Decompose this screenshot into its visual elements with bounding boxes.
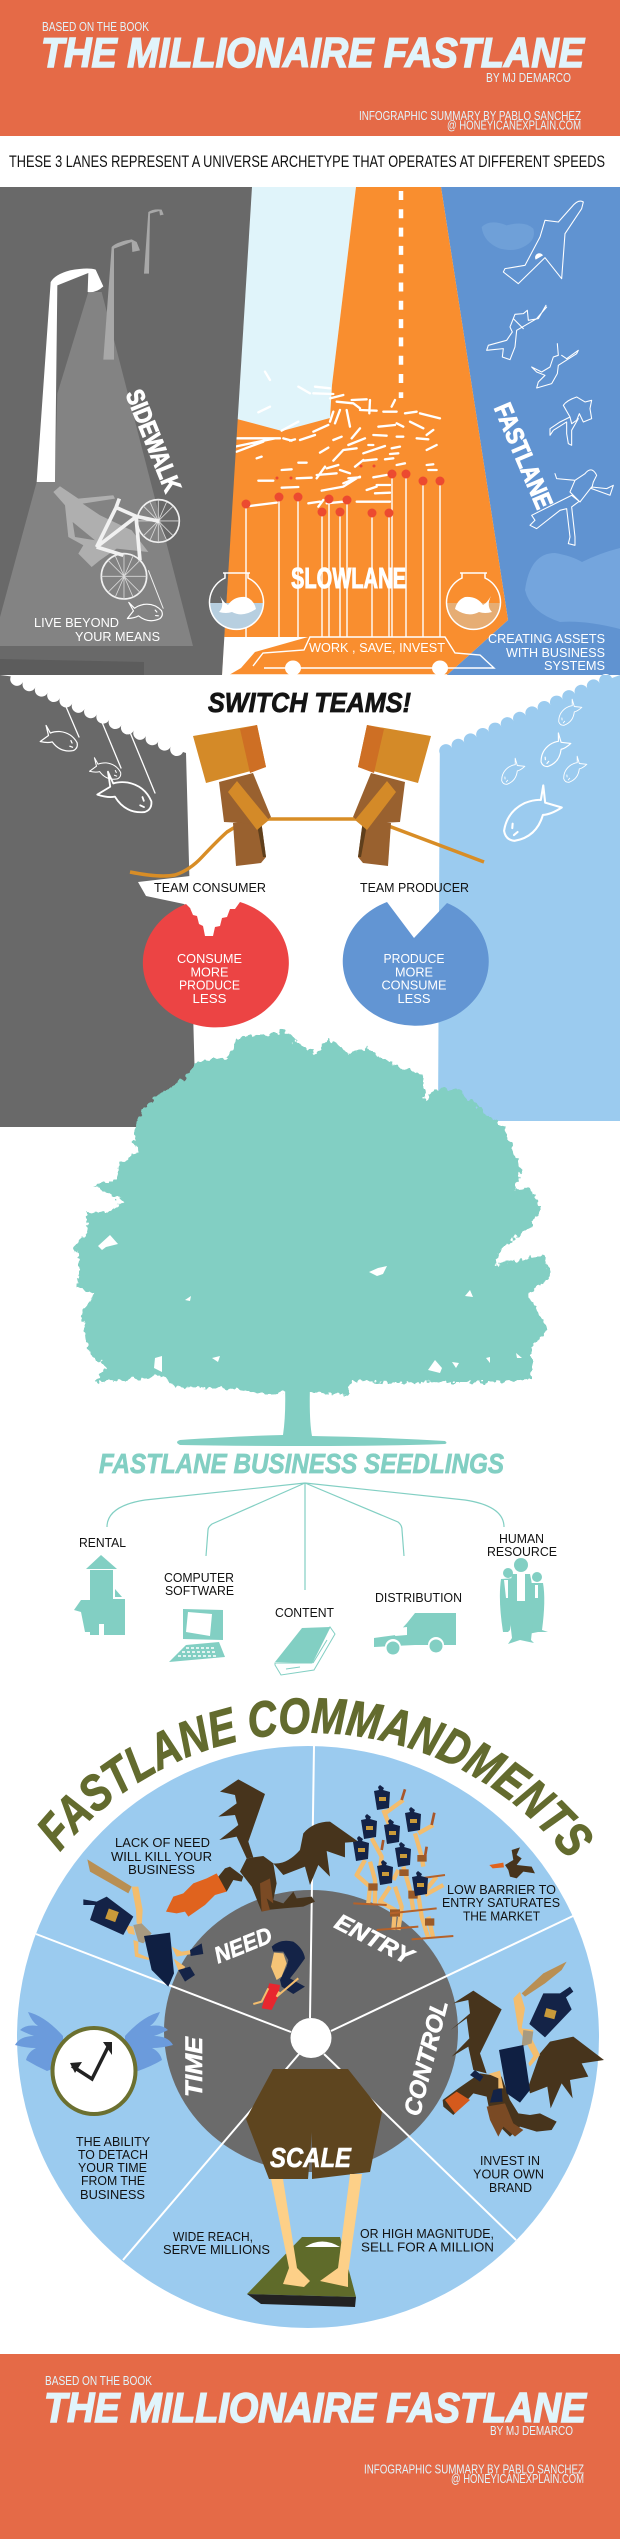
commandment caption: entry [442,1882,560,1924]
slowlane caption: WORK , SAVE, INVEST [309,640,445,655]
icon: book [275,1627,335,1675]
circle text: produce more: PRODUCE [384,951,445,966]
icon: skydiver 4 [530,470,613,545]
lamp posts with red lights [242,464,444,637]
circle text: produce more: CONSUME [382,978,447,992]
commandment caption: entry: ENTRY SATURATES [442,1895,560,1910]
lamp: near [37,268,103,482]
dragon fire [166,1873,227,1917]
commandment caption: need [111,1835,212,1877]
scalloped awning [0,674,620,1121]
circle text: produce more: LESS [398,991,431,1006]
tree holes [98,1235,522,1373]
fish on hooks [40,695,157,818]
circle text: consume more: LESS [192,991,227,1006]
road centre dashes [399,191,403,398]
team labels: TEAM PRODUCER [360,880,469,895]
figure: control dragon and knight [443,1962,604,2137]
circle: team producer [343,902,489,1026]
car outline with wheels [229,637,494,676]
fastlane figures [487,201,613,545]
fastlane label: FASTLANE [488,399,558,513]
team consumer white tab [138,876,200,915]
icon: skydiver 3 [550,397,592,445]
commandment caption: time: FROM THE [81,2173,145,2188]
commandment caption: need: BUSINESS [128,1862,195,1877]
figure: knight crowd [353,1785,453,1939]
header banner [0,0,620,136]
sidewalk caption [34,615,160,644]
icon: people [500,1558,548,1644]
circle text: produce more [382,951,447,1006]
white kerb [222,637,308,675]
seedling labels: RENTAL [79,1535,126,1550]
commandments wheel [17,1746,599,2328]
figure: need knight [83,1859,203,1987]
panel: team producer blue [438,675,620,1121]
icon: rental building [74,1555,125,1635]
commandment caption: time: THE ABILITY [76,2134,150,2149]
wheel label: time: TIME [181,2036,208,2097]
wheel label: need: NEED [210,1922,276,1968]
team labels [154,880,469,895]
commandment caption: control: YOUR OWN [473,2166,544,2182]
need quadrant figures [83,1779,358,2010]
seedling labels: COMPUTER [164,1570,234,1585]
circle text: consume more: CONSUME [177,951,242,966]
commandment caption: entry: THE MARKET [463,1908,540,1924]
icon: skydiver 2 [532,344,578,388]
circle text: consume more: MORE [190,964,229,980]
heading: fastlane commandments: FASTLANE COMMANDMENTS [37,1698,592,1856]
tree [75,1028,550,1446]
figure: need dragon [166,1779,358,1917]
team labels: TEAM CONSUMER [154,880,266,895]
city rubble [235,372,440,507]
seedling labels: SOFTWARE [165,1583,234,1598]
commandment caption: scale wide: WIDE REACH, [173,2229,253,2244]
fishbowl: right [446,573,500,630]
circle: team consumer [143,902,289,1027]
fish on hook [127,602,163,622]
figure: right box man [353,725,431,866]
commandment caption: scale high: SELL FOR A MILLION [361,2240,494,2254]
commandment caption: need: WILL KILL YOUR [111,1849,212,1864]
rope [130,819,484,876]
panel: sidewalk background [0,187,252,675]
cyclist silhouette [53,486,148,567]
header: author: BY MJ DEMARCO [486,70,571,85]
fastlane caption [488,631,605,673]
seedling labels: HUMAN [499,1531,544,1546]
fastlane caption: WITH BUSINESS [506,645,605,660]
figure: scale man [246,2069,382,2307]
commandment caption: scale high: OR HIGH MAGNITUDE, [360,2226,494,2241]
icon: truck [374,1613,456,1655]
bicycle [97,499,180,609]
commandment caption: scale wide [163,2229,270,2257]
icon: skydiver 1 [487,305,547,360]
figure: small dragon [489,1847,535,1878]
lamps, light cone and cyclist [0,209,193,646]
panel: slowlane road [222,187,508,676]
sidewalk caption: YOUR MEANS [75,629,160,644]
cloud: top [482,222,534,250]
seedling labels: RESOURCE [487,1544,557,1559]
fishbowl: left [209,573,264,630]
slowlane label: SLOWLANE [291,563,406,595]
circle text: consume more: PRODUCE [179,978,240,992]
tree trunk [177,1385,446,1446]
commandment caption: need: LACK OF NEED [115,1835,210,1850]
footer banner [0,2354,620,2539]
heading: fastlane business seedlings: FASTLANE BUSINESS SEEDLINGS [99,1448,504,1479]
commandment caption: control: BRAND [489,2180,532,2195]
icon: plane [503,201,583,284]
footer: author: BY MJ DEMARCO [490,2423,573,2438]
ground shadow [0,659,144,675]
heading: switch teams: SWITCH TEAMS! [208,687,411,718]
commandment caption: time: BUSINESS [80,2187,145,2202]
footer: based on the book: BASED ON THE BOOK [45,2373,152,2388]
seedling labels: DISTRIBUTION [375,1590,462,1605]
seedling labels: CONTENT [275,1605,334,1620]
commandment caption: time: YOUR TIME [78,2160,147,2175]
panel: team consumer gray [0,675,196,1127]
commandment caption: time [76,2134,150,2202]
commandment caption: scale wide: SERVE MILLIONS [163,2242,270,2257]
icon: winged clock [15,2012,173,2114]
lamp: far [144,209,164,274]
free fish [496,699,587,847]
wheel label: entry: ENTRY [331,1908,420,1971]
commandment caption: control [473,2153,544,2195]
fastlane caption: CREATING ASSETS [488,631,605,646]
cloud: bottom [525,548,620,629]
icon: computer [169,1609,225,1662]
commandment caption: entry: LOW BARRIER TO [447,1882,556,1897]
header: based on the book: BASED ON THE BOOK [42,19,149,34]
circle text: consume more [177,951,242,1006]
sidewalk label: SIDEWALK [120,386,186,496]
commandment caption: control: INVEST IN [480,2153,540,2168]
lamp: mid [103,239,140,360]
panel: fastlane background [441,187,620,675]
commandment caption: scale high [360,2226,494,2254]
connector lines [107,1483,504,1590]
commandment caption: time: TO DETACH [78,2147,148,2162]
fastlane caption: SYSTEMS [544,658,605,673]
circle text: produce more: MORE [395,964,433,980]
sidewalk caption: LIVE BEYOND [34,615,119,630]
wheel label: control: CONTROL [399,1998,454,2119]
seedling labels [79,1531,557,1620]
figure: child [253,1941,305,2010]
light cone [0,292,193,646]
wheel label: scale: SCALE [270,2142,352,2173]
figure: left box man [193,725,271,866]
